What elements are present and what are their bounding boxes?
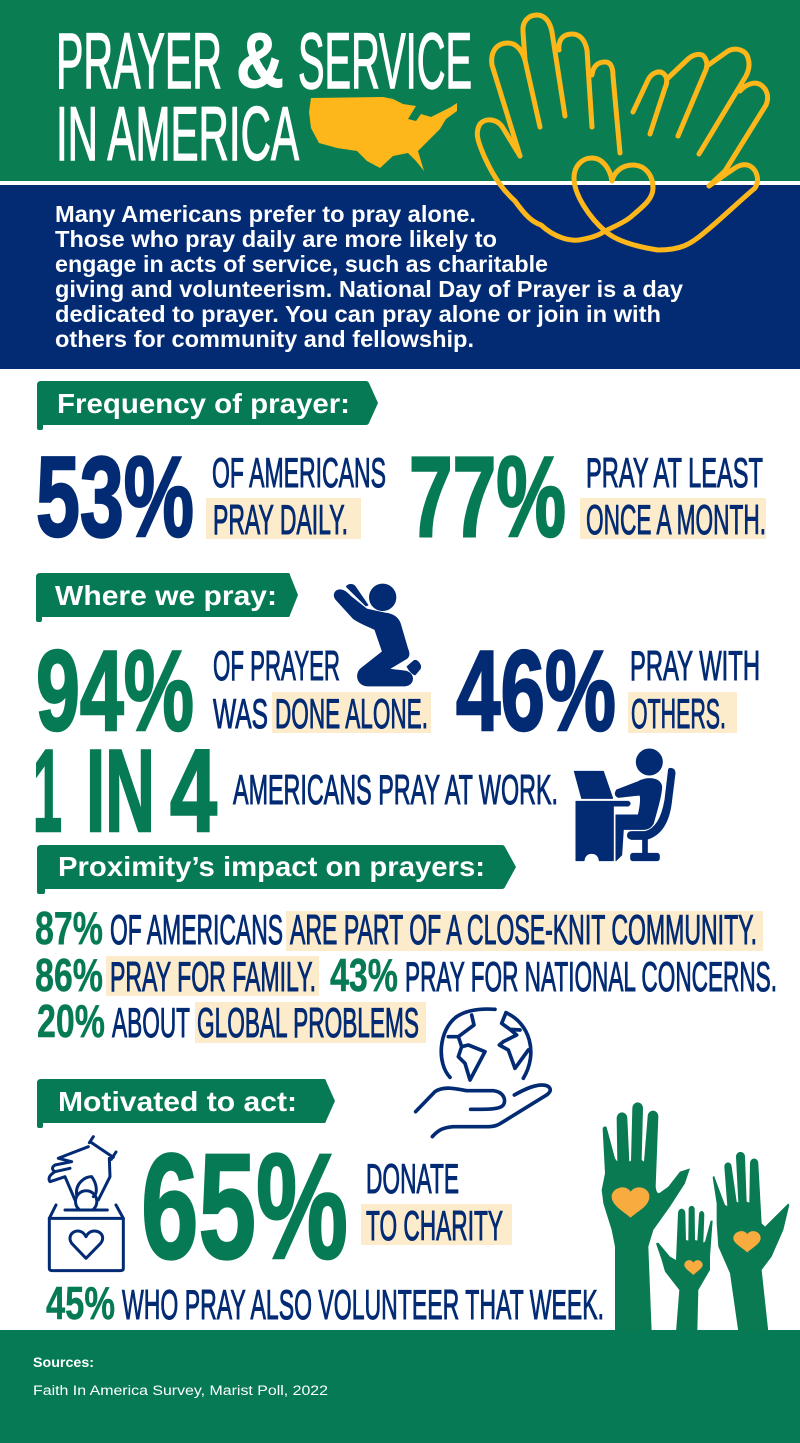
stat: 20% global problems: ABOUT	[112, 999, 190, 1046]
heading banner: frequency of prayer	[37, 381, 378, 430]
heading banner: proximity's impact on prayers	[37, 845, 516, 894]
panel: proximity's impact	[35, 845, 777, 1137]
stat: 86% family: PRAY FOR FAMILY.	[110, 953, 316, 1000]
text block: introduction: giving and volunteerism. National Day of Prayer is a day	[55, 276, 683, 302]
heading banner: where we pray	[36, 573, 298, 622]
stat: 53% pray daily: OF AMERICANS	[212, 449, 386, 496]
stat: 87% community: OF AMERICANS	[110, 906, 283, 953]
panel: footer sources: Sources:	[33, 1355, 94, 1370]
panel: where we pray	[33, 573, 760, 861]
icon: globe held in hand	[416, 1009, 550, 1137]
stat: 65% donate: 65%	[141, 1122, 348, 1290]
title: SERVICE	[298, 16, 472, 105]
stat: 53% pray daily: PRAY DAILY.	[213, 496, 348, 543]
text block: introduction: engage in acts of service, such as charitable	[55, 251, 548, 277]
heading banner: proximity's impact on prayers: Proximity’s impact on prayers:	[58, 851, 485, 882]
stat: 1 in 4 at work: 4	[170, 725, 217, 856]
heading banner: frequency of prayer: Frequency of prayer:	[57, 388, 350, 419]
icon: kneeling person praying	[335, 584, 420, 686]
stat: 94% alone: 94%	[36, 628, 194, 755]
heading banner: motivated to act	[37, 1079, 335, 1128]
stat: 94% alone: OF PRAYER	[213, 642, 340, 689]
title: IN AMERICA	[56, 92, 299, 177]
stat: 20% global problems: 20%	[37, 995, 105, 1047]
stat: 1 in 4 at work: IN	[86, 725, 155, 856]
heading banner: motivated to act: Motivated to act:	[58, 1086, 297, 1117]
text block: introduction: Those who pray daily are more likely to	[55, 226, 497, 252]
stat: 53% pray daily	[36, 434, 386, 561]
title: PRAYER	[56, 16, 222, 105]
title	[56, 16, 472, 177]
stat: 45% volunteer: 45%	[46, 1277, 115, 1329]
stat: 46% with others: 46%	[456, 628, 616, 755]
stat: 87% community: 87%	[35, 902, 103, 954]
stat: 53% pray daily: 53%	[36, 434, 194, 561]
panel: footer sources	[0, 1330, 800, 1443]
stat: 1 in 4 at work	[33, 725, 558, 856]
icon: person at desk	[574, 749, 675, 861]
panel: header	[0, 0, 800, 369]
title: &	[236, 16, 284, 104]
stat: 45% volunteer	[46, 1277, 604, 1329]
stat: 86% family	[35, 949, 319, 1001]
heading banner: where we pray: Where we pray:	[55, 580, 277, 611]
panel: motivated to act	[37, 1079, 789, 1332]
stat: 20% global problems	[37, 995, 426, 1047]
stat: 43% national concerns: 43%	[330, 949, 398, 1001]
text block: introduction: others for community and fellowship.	[55, 326, 474, 352]
stat: 94% alone	[36, 628, 431, 755]
stat: 86% family: 86%	[35, 949, 103, 1001]
text block: introduction: Many Americans prefer to pray alone.	[55, 201, 476, 227]
icon: raised hands with hearts	[602, 1102, 789, 1332]
icon: hands forming a heart	[477, 15, 768, 250]
stat: 65% donate: DONATE	[366, 1155, 459, 1202]
stat: 94% alone: WAS	[213, 690, 268, 737]
stat: 1 in 4 at work: 1	[33, 725, 62, 856]
stat: 77% pray monthly: 77%	[409, 434, 566, 561]
stat: 94% alone: DONE ALONE.	[275, 690, 428, 737]
stat: 87% community	[35, 902, 763, 954]
text block: introduction	[55, 201, 683, 352]
text block: introduction: dedicated to prayer. You can pray alone or join in with	[55, 301, 661, 327]
stat: 77% pray monthly	[409, 434, 766, 561]
icon: US map	[309, 97, 457, 171]
panel: frequency of prayer	[36, 381, 766, 561]
panel: footer sources: Faith In America Survey, Marist Poll, 2022	[33, 1383, 328, 1398]
icon: hand dropping coin in donation box	[49, 1137, 123, 1271]
stat: 65% donate: TO CHARITY	[366, 1202, 503, 1249]
stat: 20% global problems: GLOBAL PROBLEMS	[197, 999, 419, 1046]
